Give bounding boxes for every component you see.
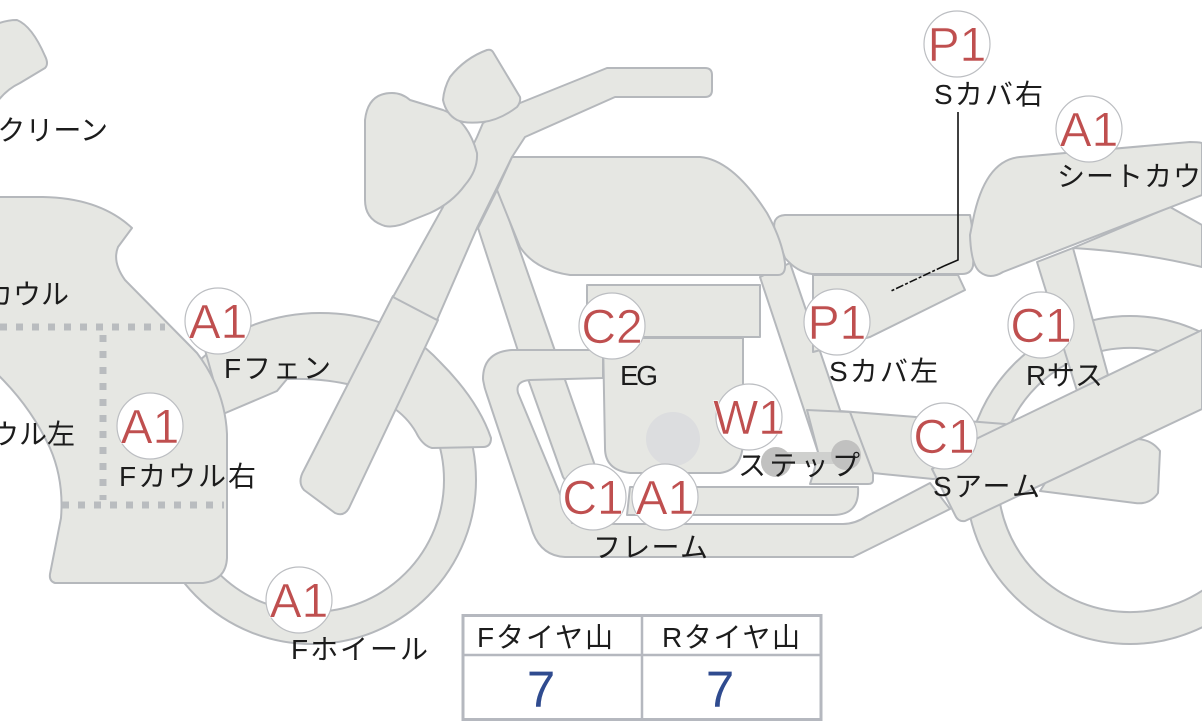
label: frame: フレーム [593,532,708,563]
step pegs and bar [761,440,861,477]
badge: F wheel A1: A1 [270,575,328,628]
label: engine: EG [620,360,658,391]
cowl panel dividers [0,327,224,505]
swingarm triangle [840,411,1005,479]
windscreen [0,20,47,105]
badge: S cover left P1: P1 [808,297,866,350]
swingarm [932,330,1202,521]
down tube upper [478,188,555,351]
rear frame [760,263,840,452]
meter [443,50,520,123]
engine cover [646,412,700,466]
frame loop [483,350,950,557]
rear seat rail [1073,207,1202,267]
side cover [813,275,965,352]
fuel tank [497,157,785,275]
table header: front tire: Fタイヤ山 [477,622,613,653]
badge: seat cowl A1: A1 [1060,104,1118,157]
table value: front tire: 7 [527,661,555,718]
badge: step W1: W1 [713,392,785,445]
engine head [587,285,760,337]
seat cowl [970,142,1202,276]
leader line: S cover right [891,112,958,291]
headlight [365,93,477,226]
badge: rear suspension C1: C1 [1010,300,1072,353]
rear shock [1037,248,1108,391]
front wheel [148,316,476,644]
rear tail [1040,439,1160,503]
down tube lower [518,351,610,510]
table header: rear tire: Rタイヤ山 [662,622,800,653]
front fender [205,313,491,448]
rear wheel [966,316,1202,644]
badge: engine C2: C2 [581,301,643,354]
badge: F cowl right A1: A1 [121,401,179,454]
tire tread table [463,615,821,720]
step plate [807,410,873,484]
exhaust bar [627,487,858,515]
label: F wheel: Fホイール [291,634,428,665]
front cowl [0,197,227,583]
seat [774,215,974,274]
label: F cowl right: Fカウル右 [119,461,256,492]
fork tube and handlebar [393,68,712,320]
badge: frame C1: C1 [562,472,624,525]
label: S cover right: Sカバ右 [934,79,1043,110]
engine body [603,338,743,473]
label: swingarm: Sアーム [933,471,1040,502]
badge: S cover right P1: P1 [928,19,986,72]
badge: swingarm C1: C1 [913,411,975,464]
label: step: ステップ [738,450,860,481]
table value: rear tire: 7 [706,661,734,718]
lower fork sleeve [300,296,438,514]
badge: F fender A1: A1 [189,296,247,349]
label: S cover left: Sカバ左 [829,356,938,387]
badge: frame A1: A1 [636,472,694,525]
label: F fender: Fフェン [224,353,331,384]
label: rear suspension: Rサス [1026,360,1103,391]
